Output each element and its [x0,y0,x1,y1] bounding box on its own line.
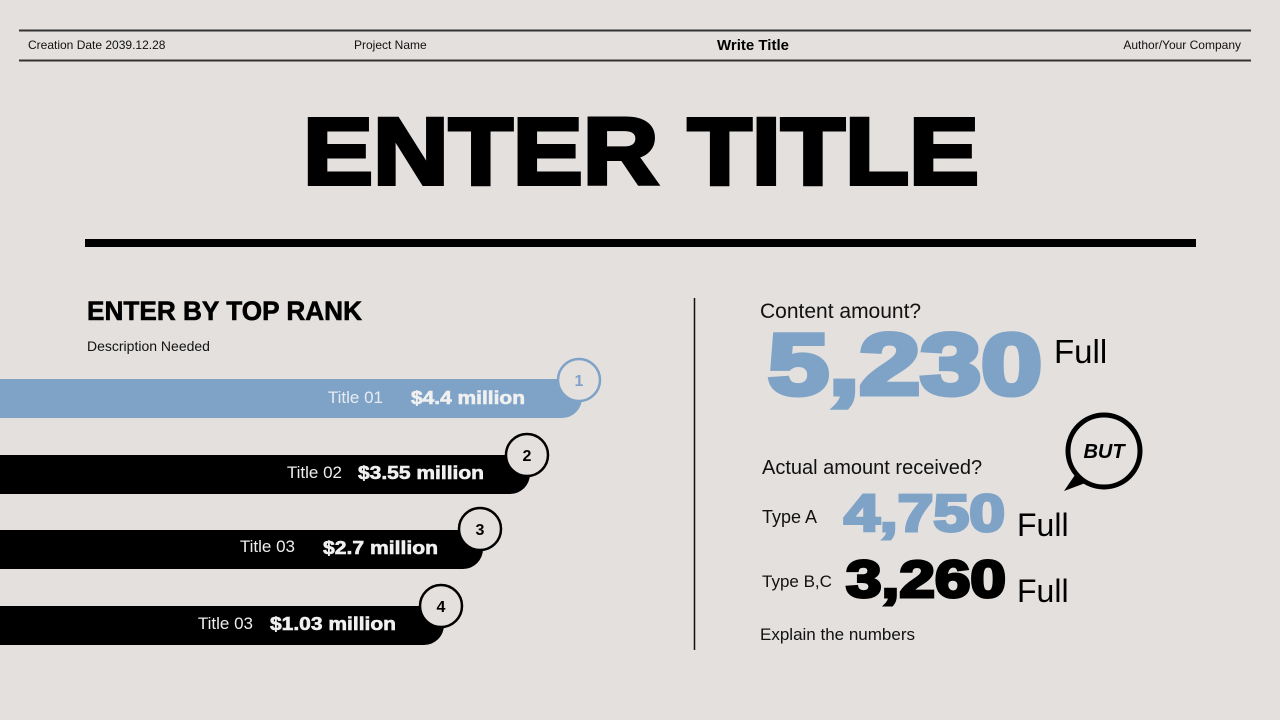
rank bar 1: $4.4 million [411,388,525,408]
rank bar 4 [0,585,462,645]
rank bar 1: Title 01 [328,388,383,407]
rank bar 2 [0,434,548,494]
rank bar 2: 2 [523,448,532,465]
rank bar 3: Title 03 [240,537,295,556]
type A row [762,485,1069,543]
header bar: Author/Your Company [1123,38,1241,52]
icon: BUT speech bubble [1064,415,1140,491]
rank bar 3 [0,508,501,569]
actual amount label: Actual amount received? [762,457,982,479]
big number 5,230 [768,317,1107,413]
header bar: Creation Date 2039.12.28 [28,38,166,52]
type B,C row: 3,260 [846,551,1006,609]
type A row: 4,750 [844,485,1005,543]
big number 5,230: Full [1054,333,1107,370]
rank bar 1: 1 [575,373,584,390]
rank bar 3: 3 [476,522,485,539]
type B,C row [762,551,1069,609]
header bar: Write Title [717,37,789,54]
header bar [19,30,1251,60]
title rule [85,239,1196,247]
icon: BUT speech bubble: BUT [1083,441,1126,463]
rank bar 3: $2.7 million [323,538,438,558]
rank bar 4: $1.03 million [270,614,396,634]
section heading: ENTER BY TOP RANK [87,296,362,326]
type A row: Type A [762,507,817,527]
type B,C row: Type B,C [762,572,832,591]
big number 5,230: 5,230 [768,317,1042,413]
vertical divider [694,298,696,650]
explanation text: Explain the numbers [760,625,915,644]
rank bar 1 [0,359,600,418]
rank bar 4: 4 [437,599,446,616]
type B,C row: Full [1017,573,1069,609]
header bar: Project Name [354,38,427,52]
rank bar 2: $3.55 million [358,463,484,483]
title: ENTER TITLE [303,99,979,205]
rank bar 4: Title 03 [198,614,253,633]
content amount label: Content amount? [760,300,921,323]
description: Description Needed [87,338,210,354]
type A row: Full [1017,507,1069,543]
rank bar 2: Title 02 [287,463,342,482]
